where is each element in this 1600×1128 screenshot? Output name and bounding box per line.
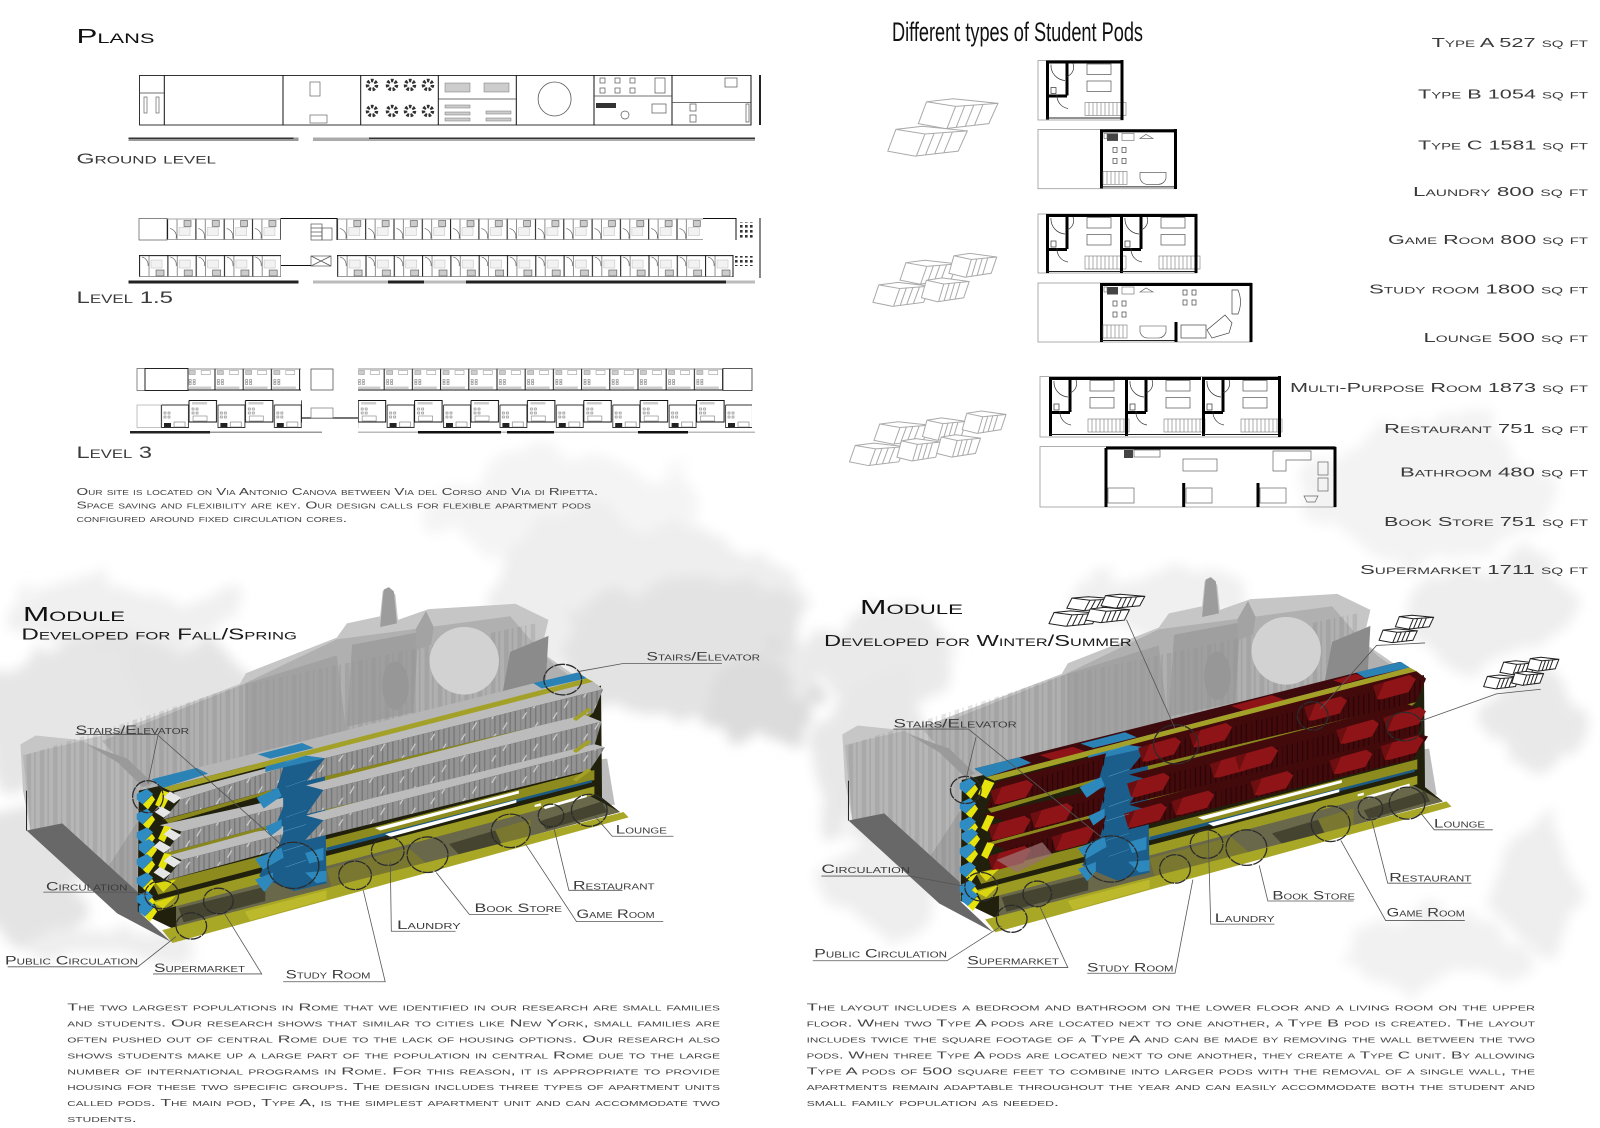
floor plan: Type C	[1040, 376, 1336, 507]
lower floors and circulation core	[138, 686, 629, 943]
module B: Winter/Summer axonometric	[813, 577, 1559, 973]
axonometric: Type B pod	[873, 253, 997, 306]
axonometric: Type C pod	[849, 411, 1006, 466]
module A labels: Lounge	[616, 822, 667, 836]
text block: layout: The layout includes a bedroom and bathroom on the lower floor and a living room on the upper	[807, 1001, 1535, 1013]
list: square footage by program: Type C 1581 sq ft	[1418, 138, 1589, 153]
text block: populations	[67, 1001, 721, 1125]
plan: ground level	[128, 75, 760, 141]
heading: Different types of Student Pods: Different types of Student Pods	[892, 17, 1143, 47]
label: Ground level: Ground level	[76, 150, 216, 168]
white pod ends	[154, 791, 181, 879]
text block: site description	[76, 486, 598, 525]
module A labels: Circulation	[46, 880, 128, 894]
module B labels: Circulation	[821, 862, 910, 876]
list: square footage by program: Multi-Purpose Room 1873 sq ft	[1290, 380, 1589, 395]
plan: level 1.5	[128, 218, 760, 284]
module A labels: Public Circulation	[5, 953, 138, 967]
list: square footage by program: Type A 527 sq ft	[1432, 35, 1589, 50]
module A labels: Stairs/Elevator	[76, 723, 189, 737]
module A labels: Stairs/Elevator	[646, 650, 760, 664]
list: square footage by program: Restaurant 751 sq ft	[1384, 421, 1589, 436]
text block: populations: The two largest populations in Rome that we identified in our research are small families	[67, 1001, 721, 1013]
list: square footage by program: Lounge 500 sq ft	[1424, 330, 1589, 345]
building context	[842, 577, 1437, 932]
text block: populations: called pods. The main pod, Type A, is the simplest apartment unit and can accommodate two	[67, 1097, 721, 1109]
label: Level 1.5: Level 1.5	[76, 288, 173, 307]
subheading: Developed for Fall/Spring: Developed for Fall/Spring	[21, 626, 297, 643]
module B labels: Supermarket	[967, 954, 1059, 968]
module B labels: Stairs/Elevator	[893, 717, 1017, 731]
floor plan: Type A	[1038, 60, 1176, 189]
module B labels: Game Room	[1387, 906, 1465, 920]
list: square footage by program: Laundry 800 sq ft	[1413, 184, 1589, 199]
list: square footage by program: Supermarket 1711 sq ft	[1360, 562, 1589, 577]
stack with red pods	[960, 662, 1452, 932]
text block: layout: pods. When three Type A pods are located next to one another, they create a Type C unit. By allowing	[807, 1049, 1535, 1061]
label: Level 3: Level 3	[76, 443, 152, 462]
building context	[20, 587, 615, 942]
axonometric: Type A pod	[888, 99, 998, 156]
core ledges	[1078, 744, 1149, 881]
text block: populations: and students. Our research shows that similar to cities like New York, small families are	[67, 1017, 721, 1029]
module A labels: Supermarket	[154, 961, 245, 975]
text block: layout: includes twice the square footage of a Type A and can be made by removing the wall between the two	[807, 1033, 1536, 1045]
module A labels: Game Room	[576, 907, 655, 921]
module A labels: Study Room	[286, 968, 371, 982]
text block: layout	[807, 1001, 1536, 1109]
text block: layout: Type A pods of 500 square feet to combine into larger pods with the removal of a single wall, the	[807, 1065, 1536, 1077]
callout circles	[133, 664, 607, 939]
module B labels	[814, 717, 1485, 974]
text block: layout: small family population as needed.	[807, 1097, 1059, 1109]
heading: Plans: Plans	[76, 26, 154, 48]
leader lines	[8, 664, 722, 982]
module B labels: Lounge	[1434, 816, 1485, 830]
heading: Module (right): Module	[860, 597, 963, 619]
floor plan: Type B	[1038, 214, 1252, 342]
plan: level 3	[130, 368, 755, 434]
list: square footage by program: Game Room 800 sq ft	[1388, 232, 1589, 247]
module A labels: Restaurant	[573, 878, 655, 892]
gray pod bars	[160, 689, 605, 881]
background: watercolor clouds	[0, 425, 1585, 980]
module B labels: Public Circulation	[814, 947, 947, 961]
subheading: Developed for Winter/Summer: Developed for Winter/Summer	[824, 633, 1132, 650]
module B labels: Restaurant	[1389, 870, 1472, 884]
text block: populations: students.	[67, 1113, 137, 1125]
red pod bars	[983, 671, 1428, 873]
stair ends	[137, 789, 176, 922]
small pod axonometrics	[1049, 594, 1559, 689]
text block: site description: Space saving and flexibility are key. Our design calls for flexible apartment pods	[76, 500, 591, 512]
list: square footage by program: Bathroom 480 sq ft	[1400, 464, 1589, 480]
leader lines	[813, 620, 1541, 973]
list: square footage by program: Study room 1800 sq ft	[1369, 282, 1589, 297]
text block: site description: configured around fixed circulation cores.	[76, 513, 347, 525]
roof level	[152, 672, 603, 800]
text block: layout: apartments remain adaptable throughout the year and can easily accommodate both the student and	[807, 1081, 1535, 1093]
roof level	[974, 662, 1416, 781]
module A labels: Laundry	[397, 918, 462, 932]
text block: layout: floor. When two Type A pods are located next to one another, a Type B pod is created. The layout	[807, 1017, 1536, 1029]
module B labels: Laundry	[1215, 911, 1275, 925]
text block: site description: Our site is located on Via Antonio Canova between Via del Corso and Via di Ripetta.	[76, 486, 598, 498]
core ledges	[255, 755, 327, 892]
module A: Fall/Spring axonometric	[8, 587, 722, 982]
text block: populations: housing for these two specific groups. The design includes three types of apartment units	[67, 1081, 721, 1093]
text block: populations: shows students make up a large part of the population in central Rome due to the large	[67, 1049, 721, 1061]
module B labels: Study Room	[1087, 960, 1174, 974]
text block: populations: often pushed out of central Rome due to the lack of housing options. Our research also	[67, 1033, 721, 1045]
heading: Module (left): Module	[23, 604, 125, 626]
list: square footage by program: Type B 1054 sq ft	[1418, 86, 1589, 101]
text block: populations: number of international programs in Rome. For this reason, it is appropriate to provide	[67, 1065, 721, 1077]
list: square footage by program: Book Store 751 sq ft	[1384, 514, 1589, 529]
callout circles	[951, 702, 1425, 932]
module A labels	[5, 650, 760, 982]
module B labels: Book Store	[1272, 889, 1355, 903]
module A labels: Book Store	[474, 901, 562, 915]
list: square footage by program	[1290, 35, 1589, 577]
